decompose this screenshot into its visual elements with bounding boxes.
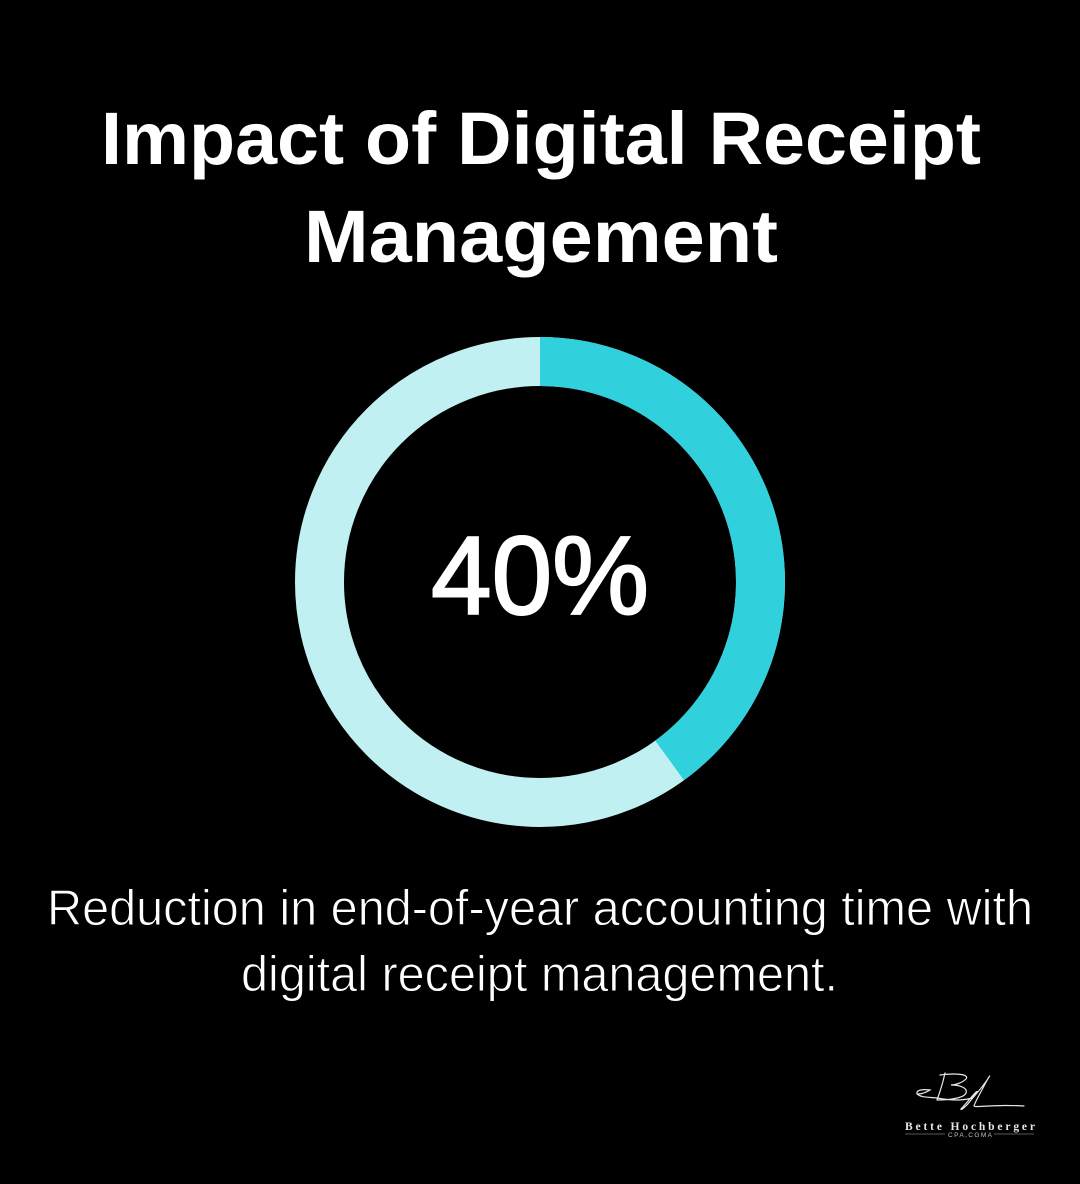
signature xyxy=(917,1073,1024,1110)
name: Bette Hochberger xyxy=(905,1121,1035,1133)
title: Impact of Digital Receipt xyxy=(101,97,981,180)
description: digital receipt management. xyxy=(241,946,838,1002)
title xyxy=(101,97,981,278)
title: Management xyxy=(304,195,778,278)
donut chart: 40% xyxy=(320,362,761,802)
description xyxy=(47,880,1033,1002)
description: Reduction in end-of-year accounting time with xyxy=(47,880,1033,936)
logo: Bette Hochberger xyxy=(905,1073,1035,1139)
credentials: CPA,CGMA xyxy=(948,1132,993,1139)
center value: 40% xyxy=(431,514,649,638)
